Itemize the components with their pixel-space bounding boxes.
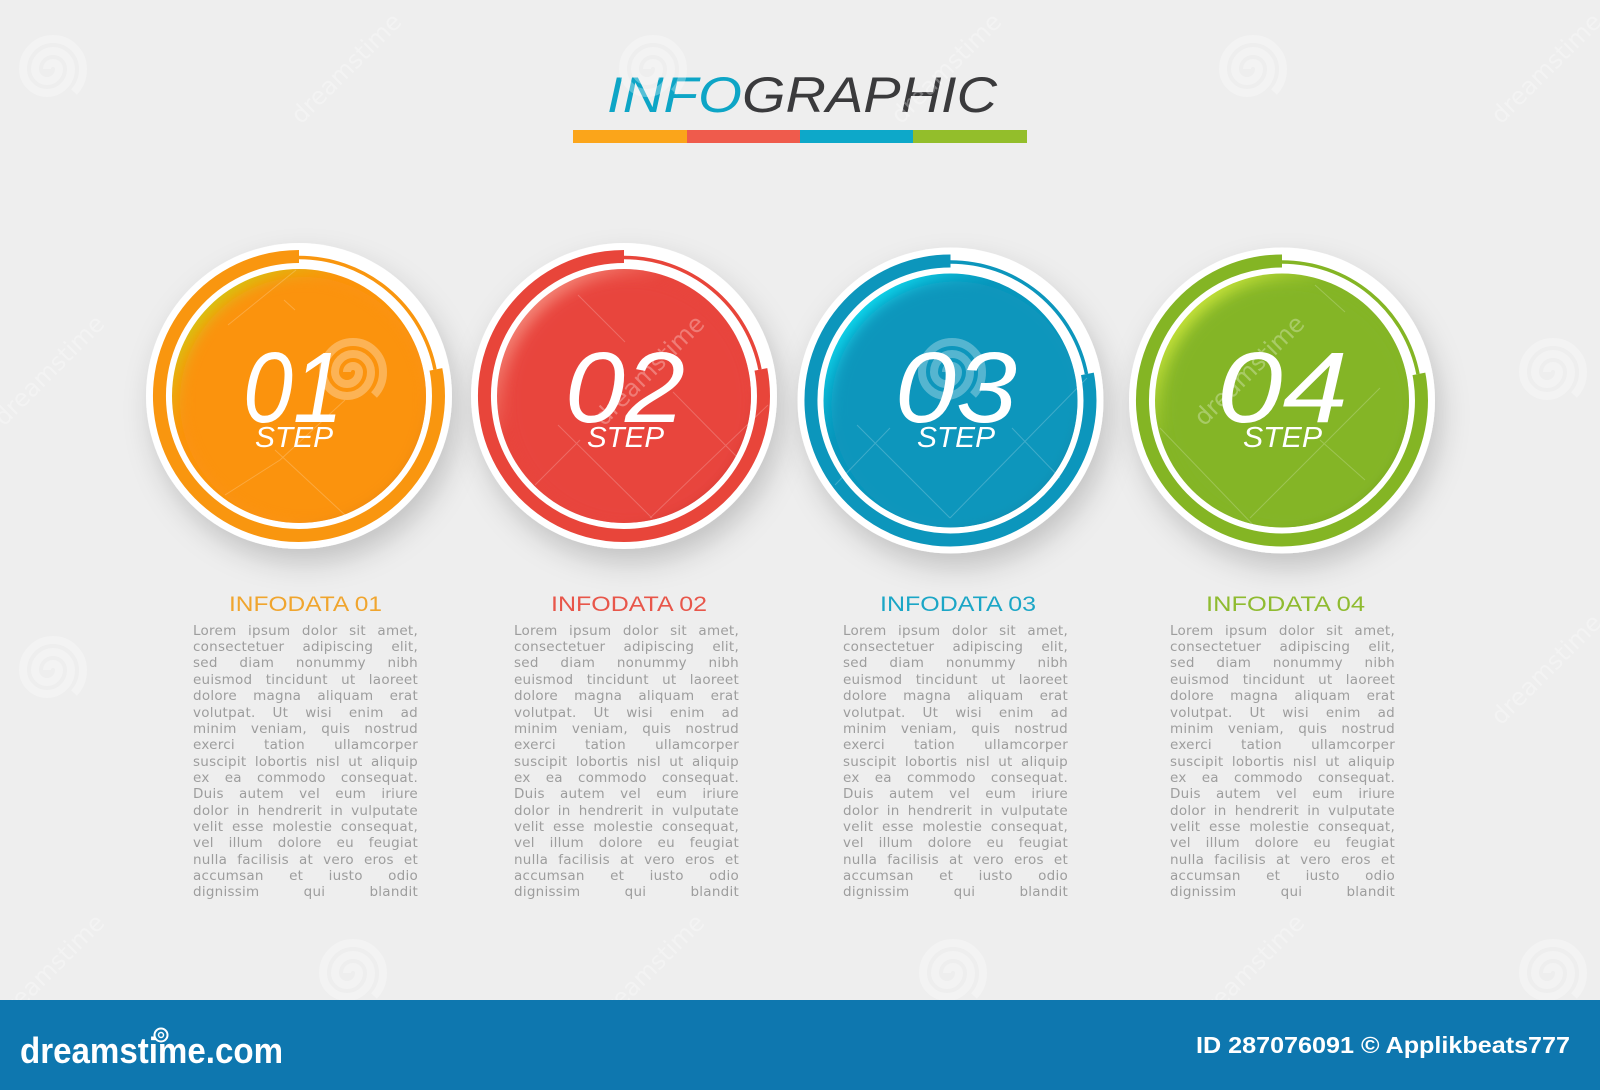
body text column 4: minim veniam, quis nostrud — [1170, 721, 1395, 737]
footer logo: dreamstime.com — [20, 1030, 283, 1071]
body text column 3: ex ea commodo consequat. — [843, 770, 1068, 786]
body text column 1: Lorem ipsum dolor sit amet, — [193, 623, 418, 639]
body text column 1: volutpat. Ut wisi enim ad — [193, 705, 418, 721]
body text column 2: euismod tincidunt ut laoreet — [514, 672, 739, 688]
body text column 3: suscipit lobortis nisl ut aliquip — [843, 754, 1068, 770]
body text column 2 — [514, 623, 739, 900]
body text column 2: consectetuer adipiscing elit, — [514, 639, 739, 655]
body text column 2: dolore magna aliquam erat — [514, 688, 739, 704]
body text column 2: accumsan et iusto odio — [514, 868, 739, 884]
body text column 4: Lorem ipsum dolor sit amet, — [1170, 623, 1395, 639]
column headings: INFODATA 02 — [551, 593, 707, 616]
column headings: INFODATA 01 — [229, 593, 382, 616]
body text column 3: Duis autem vel eum iriure — [843, 786, 1068, 802]
step 1 label: 01 — [243, 332, 343, 444]
body text column 2: Lorem ipsum dolor sit amet, — [514, 623, 739, 639]
body text column 4: ex ea commodo consequat. — [1170, 770, 1395, 786]
body text column 4: euismod tincidunt ut laoreet — [1170, 672, 1395, 688]
step 3 badge — [798, 248, 1104, 554]
step 3 label: 03 — [895, 332, 1017, 444]
body text column 4: accumsan et iusto odio — [1170, 868, 1395, 884]
watermark pattern: dreamstime — [1188, 908, 1310, 1030]
footer bar — [0, 1000, 1600, 1090]
body text column 1: dolor in hendrerit in vulputate — [193, 803, 418, 819]
body text column 4: nulla facilisis at vero eros et — [1170, 852, 1395, 868]
body text column 2: vel illum dolore eu feugiat — [514, 835, 739, 851]
title colour bar — [573, 130, 1027, 143]
body text column 1: nulla facilisis at vero eros et — [193, 852, 418, 868]
body text column 4: sed diam nonummy nibh — [1170, 655, 1395, 671]
body text column 2: nulla facilisis at vero eros et — [514, 852, 739, 868]
body text column 2: ex ea commodo consequat. — [514, 770, 739, 786]
title — [607, 67, 998, 123]
step 2 label: 02 — [565, 332, 685, 444]
body text column 2: minim veniam, quis nostrud — [514, 721, 739, 737]
step 3 label: STEP — [917, 422, 996, 454]
title: GRAPHIC — [742, 67, 998, 123]
body text column 3: accumsan et iusto odio — [843, 868, 1068, 884]
body text column 3: dignissim qui blandit — [843, 884, 1068, 900]
column headings: INFODATA 03 — [880, 593, 1036, 616]
body text column 2: volutpat. Ut wisi enim ad — [514, 705, 739, 721]
body text column 4: dignissim qui blandit — [1170, 884, 1395, 900]
body text column 3: nulla facilisis at vero eros et — [843, 852, 1068, 868]
step 4 label: 04 — [1217, 332, 1348, 444]
step 4 label: STEP — [1243, 422, 1323, 454]
body text column 4: vel illum dolore eu feugiat — [1170, 835, 1395, 851]
body text column 1: euismod tincidunt ut laoreet — [193, 672, 418, 688]
body text column 1 — [193, 623, 418, 900]
body text column 2: dignissim qui blandit — [514, 884, 739, 900]
body text column 1: accumsan et iusto odio — [193, 868, 418, 884]
watermark pattern: dreamstime — [885, 7, 1007, 129]
step 1 badge — [146, 243, 452, 549]
body text column 1: sed diam nonummy nibh — [193, 655, 418, 671]
title: INFO — [607, 67, 742, 123]
body text column 1: dolore magna aliquam erat — [193, 688, 418, 704]
body text column 4: exerci tation ullamcorper — [1170, 737, 1395, 753]
body text column 1: dignissim qui blandit — [193, 884, 418, 900]
body text column 1: consectetuer adipiscing elit, — [193, 639, 418, 655]
body text column 4: suscipit lobortis nisl ut aliquip — [1170, 754, 1395, 770]
body text column 2: Duis autem vel eum iriure — [514, 786, 739, 802]
body text column 3: minim veniam, quis nostrud — [843, 721, 1068, 737]
body text column 4: consectetuer adipiscing elit, — [1170, 639, 1395, 655]
body text column 2: sed diam nonummy nibh — [514, 655, 739, 671]
column headings — [229, 593, 1365, 616]
watermark pattern: dreamstime — [588, 908, 710, 1030]
body text column 1: suscipit lobortis nisl ut aliquip — [193, 754, 418, 770]
body text column 4: dolore magna aliquam erat — [1170, 688, 1395, 704]
body text column 2: dolor in hendrerit in vulputate — [514, 803, 739, 819]
body text column 3: velit esse molestie consequat, — [843, 819, 1068, 835]
body text column 4: velit esse molestie consequat, — [1170, 819, 1395, 835]
column headings: INFODATA 04 — [1206, 593, 1365, 616]
footer credit: ID 287076091 © Applikbeats777 — [1196, 1032, 1570, 1058]
body text column 3: dolore magna aliquam erat — [843, 688, 1068, 704]
body text column 1: exerci tation ullamcorper — [193, 737, 418, 753]
body text column 3 — [843, 623, 1068, 900]
body text column 2: exerci tation ullamcorper — [514, 737, 739, 753]
watermark pattern: dreamstime — [1188, 309, 1310, 431]
step 2 label: STEP — [587, 422, 665, 454]
body text column 1: vel illum dolore eu feugiat — [193, 835, 418, 851]
body text column 3: sed diam nonummy nibh — [843, 655, 1068, 671]
body text column 3: euismod tincidunt ut laoreet — [843, 672, 1068, 688]
step 2 badge — [471, 243, 777, 549]
body text column 4 — [1170, 623, 1395, 900]
body text column 1: velit esse molestie consequat, — [193, 819, 418, 835]
body text column 3: exerci tation ullamcorper — [843, 737, 1068, 753]
body text column 1: minim veniam, quis nostrud — [193, 721, 418, 737]
step 4 badge — [1129, 248, 1435, 554]
step 1 label: STEP — [255, 422, 334, 454]
body text column 4: dolor in hendrerit in vulputate — [1170, 803, 1395, 819]
body text column 3: volutpat. Ut wisi enim ad — [843, 705, 1068, 721]
body text column 4: Duis autem vel eum iriure — [1170, 786, 1395, 802]
body text column 3: vel illum dolore eu feugiat — [843, 835, 1068, 851]
body text column 2: suscipit lobortis nisl ut aliquip — [514, 754, 739, 770]
body text column 3: consectetuer adipiscing elit, — [843, 639, 1068, 655]
body text column 3: dolor in hendrerit in vulputate — [843, 803, 1068, 819]
watermark pattern: dreamstime — [588, 309, 710, 431]
body text column 1: ex ea commodo consequat. — [193, 770, 418, 786]
body text column 4: volutpat. Ut wisi enim ad — [1170, 705, 1395, 721]
watermark pattern: dreamstime — [285, 7, 407, 129]
body text column 1: Duis autem vel eum iriure — [193, 786, 418, 802]
body text column 2: velit esse molestie consequat, — [514, 819, 739, 835]
body text column 3: Lorem ipsum dolor sit amet, — [843, 623, 1068, 639]
